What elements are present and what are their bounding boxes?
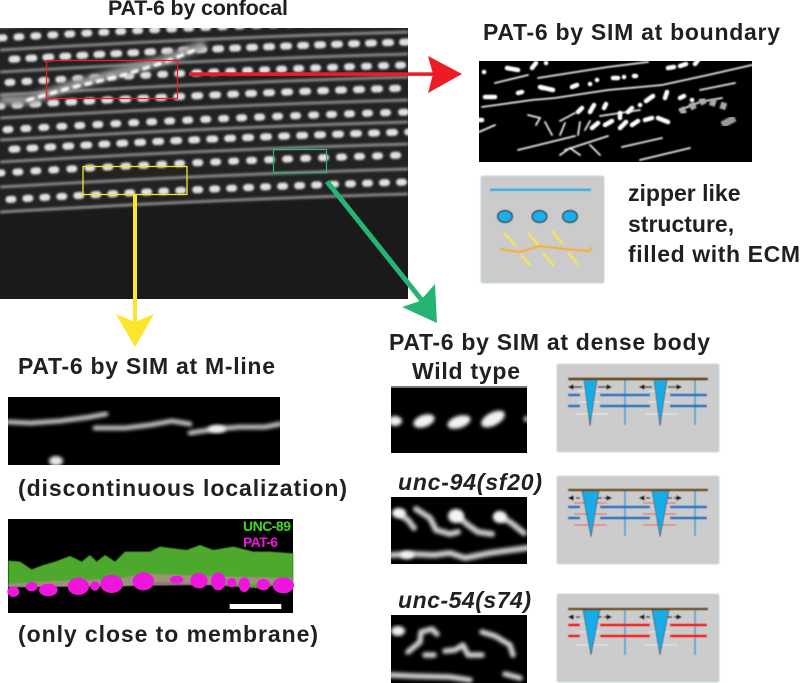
text: zipper description: [628, 180, 800, 267]
caption: only close to membrane: (only close to membrane): [18, 621, 318, 647]
3D image: UNC-89 and PAT-6: [7, 518, 294, 613]
3D image: UNC-89 and PAT-6: PAT-6: [243, 534, 278, 550]
schematic: wild type: [557, 364, 719, 452]
schematic: zipper structure: [481, 176, 604, 283]
SIM image: wild type: [388, 386, 528, 453]
label: unc-94(sf20): unc-94(sf20): [398, 469, 542, 495]
SIM image: unc-94: [391, 497, 527, 564]
confocal micrograph: [0, 9, 408, 299]
schematic: unc-94: [557, 476, 719, 564]
SIM image: M-line: [8, 397, 280, 466]
SIM image: unc-54: [391, 615, 527, 683]
text: zipper description: structure,: [628, 211, 734, 237]
SIM image: boundary: [479, 60, 752, 162]
heading: SIM at M-line: PAT-6 by SIM at M-line: [18, 353, 275, 379]
label: wild type: Wild type: [412, 358, 520, 384]
caption: discontinuous localization: (discontinuous localization): [18, 475, 347, 501]
text: zipper description: filled with ECM: [628, 241, 800, 267]
arrow: yellow to M-line: [116, 194, 154, 347]
3D image: UNC-89 and PAT-6: UNC-89: [243, 518, 291, 534]
heading: SIM at dense body: PAT-6 by SIM at dense body: [389, 329, 710, 355]
text: zipper description: zipper like: [628, 180, 740, 206]
heading: SIM at boundary: PAT-6 by SIM at boundary: [483, 19, 780, 45]
yellow selection box: [83, 166, 187, 194]
label: unc-54(s74): unc-54(s74): [398, 587, 531, 613]
green selection box: [274, 150, 326, 172]
arrow: green to dense body: [325, 180, 437, 323]
red selection box: [46, 60, 178, 98]
schematic: unc-54: [557, 594, 719, 682]
arrow: red to boundary: [189, 56, 462, 93]
